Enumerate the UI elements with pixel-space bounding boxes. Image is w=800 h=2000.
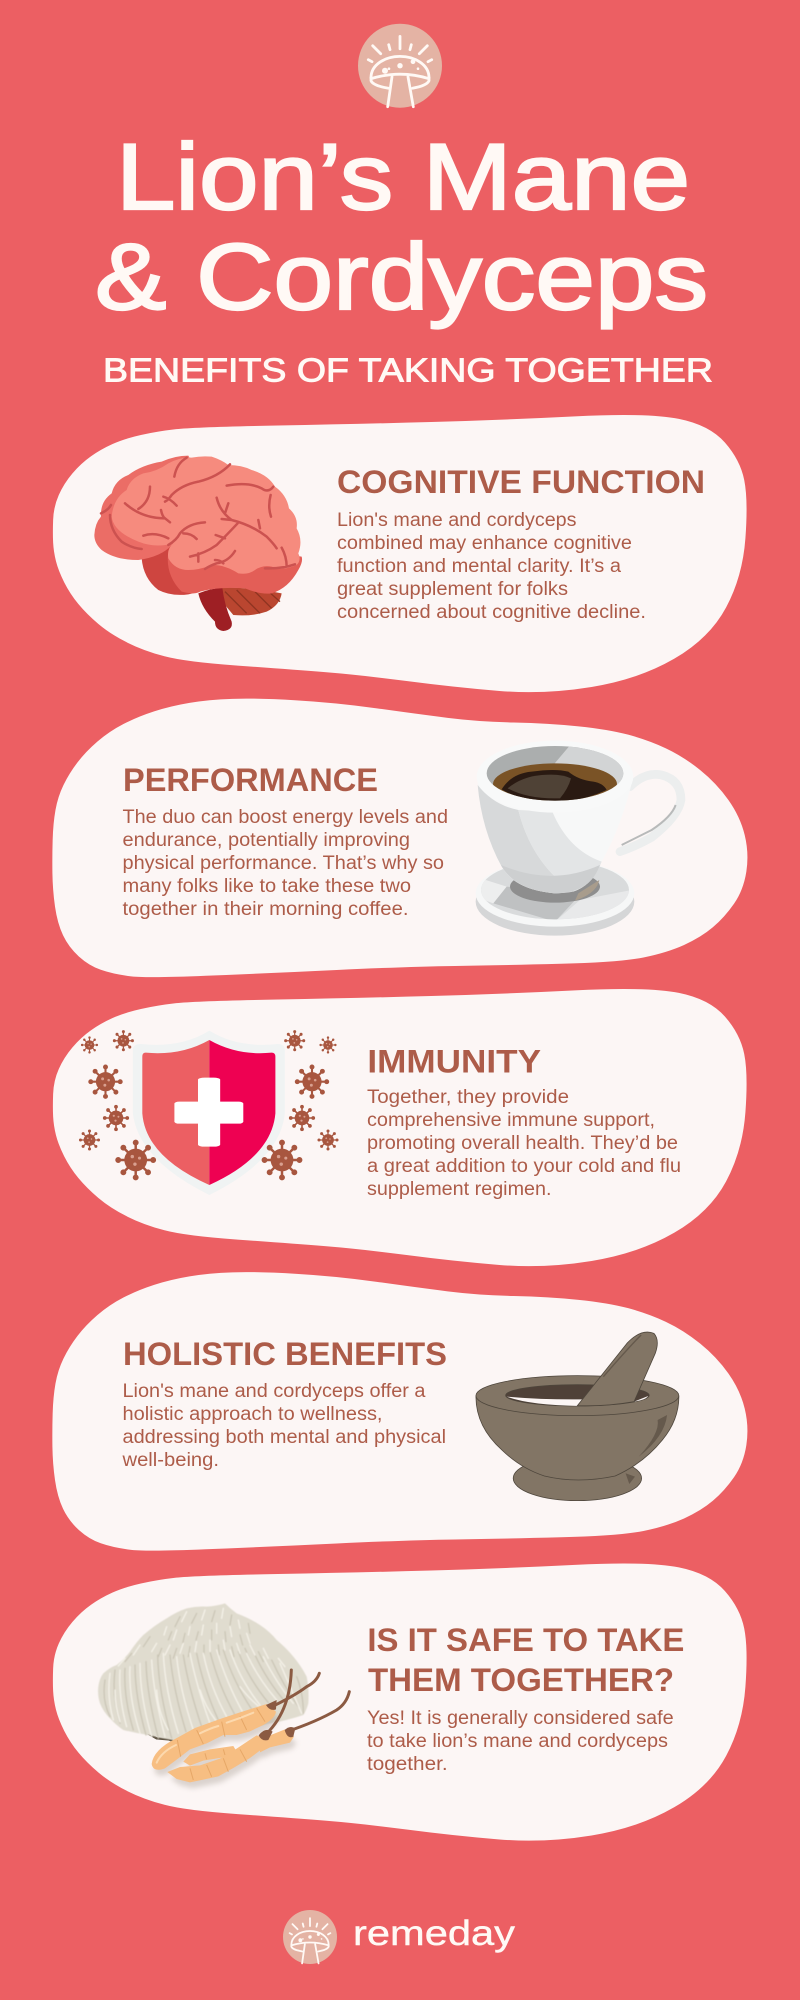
title bbox=[95, 124, 708, 329]
body text: addressing both mental and physical bbox=[122, 1427, 446, 1448]
body text: great supplement for folks bbox=[337, 579, 568, 600]
blob background bbox=[52, 699, 747, 977]
body text: supplement regimen. bbox=[367, 1179, 552, 1200]
body text: endurance, potentially improving bbox=[122, 830, 410, 851]
panel: cognitive function bbox=[53, 415, 747, 692]
body text: Lion's mane and cordyceps bbox=[337, 510, 576, 531]
cordyceps bbox=[152, 1670, 349, 1788]
panel: safety bbox=[53, 1563, 747, 1841]
body text: many folks like to take these two bbox=[122, 876, 411, 897]
body text: together in their morning coffee. bbox=[122, 899, 408, 920]
body text: holistic approach to wellness, bbox=[122, 1404, 382, 1425]
logo: mushroom badge bbox=[358, 24, 442, 108]
heading: COGNITIVE FUNCTION bbox=[337, 464, 705, 500]
body text: concerned about cognitive decline. bbox=[337, 602, 646, 623]
lion's mane mushroom bbox=[98, 1603, 309, 1742]
body text: comprehensive immune support, bbox=[367, 1110, 655, 1131]
heading: THEM TOGETHER? bbox=[368, 1662, 674, 1698]
icon: lion's mane mushroom and cordyceps bbox=[98, 1603, 349, 1788]
title: Lion’s Mane bbox=[116, 124, 690, 229]
heading: HOLISTIC BENEFITS bbox=[123, 1336, 447, 1372]
body text: Lion's mane and cordyceps offer a bbox=[122, 1381, 426, 1402]
heading: IS IT SAFE TO TAKE bbox=[367, 1622, 684, 1658]
brand name: remeday bbox=[353, 1914, 516, 1953]
panel: immunity bbox=[53, 989, 747, 1266]
body text: a great addition to your cold and flu bbox=[367, 1156, 681, 1177]
body text: Yes! It is generally considered safe bbox=[367, 1708, 674, 1729]
body text: to take lion’s mane and cordyceps bbox=[367, 1731, 668, 1752]
body text bbox=[337, 510, 646, 623]
footer logo: remeday bbox=[283, 1910, 516, 1964]
body text: promoting overall health. They’d be bbox=[367, 1133, 678, 1154]
icon: viruses bbox=[80, 1031, 338, 1179]
body text: together. bbox=[367, 1754, 448, 1775]
body text: well-being. bbox=[121, 1450, 219, 1471]
icon: shield with cross bbox=[133, 1031, 285, 1195]
panel: performance bbox=[52, 699, 747, 977]
icon: mortar and pestle bbox=[476, 1332, 679, 1501]
body text: Together, they provide bbox=[367, 1087, 569, 1108]
body text bbox=[367, 1708, 674, 1775]
body text bbox=[122, 807, 448, 920]
blob background bbox=[53, 1563, 747, 1841]
subtitle: BENEFITS OF TAKING TOGETHER bbox=[103, 352, 713, 388]
heading bbox=[367, 1622, 684, 1698]
body text: function and mental clarity. It’s a bbox=[337, 556, 621, 577]
icon: coffee cup bbox=[475, 741, 681, 936]
icon: mushroom badge bbox=[283, 1910, 337, 1964]
heading: IMMUNITY bbox=[367, 1044, 541, 1080]
blob background bbox=[53, 415, 747, 692]
body text: physical performance. That’s why so bbox=[122, 853, 444, 874]
title: & Cordyceps bbox=[95, 224, 708, 329]
blob background bbox=[53, 989, 747, 1266]
body text bbox=[121, 1381, 446, 1471]
body text: combined may enhance cognitive bbox=[337, 533, 632, 554]
body text bbox=[367, 1087, 681, 1200]
blob background bbox=[52, 1272, 747, 1551]
panel: holistic benefits bbox=[52, 1272, 747, 1551]
icon: brain bbox=[94, 456, 302, 631]
body text: The duo can boost energy levels and bbox=[122, 807, 448, 828]
heading: PERFORMANCE bbox=[123, 762, 378, 798]
